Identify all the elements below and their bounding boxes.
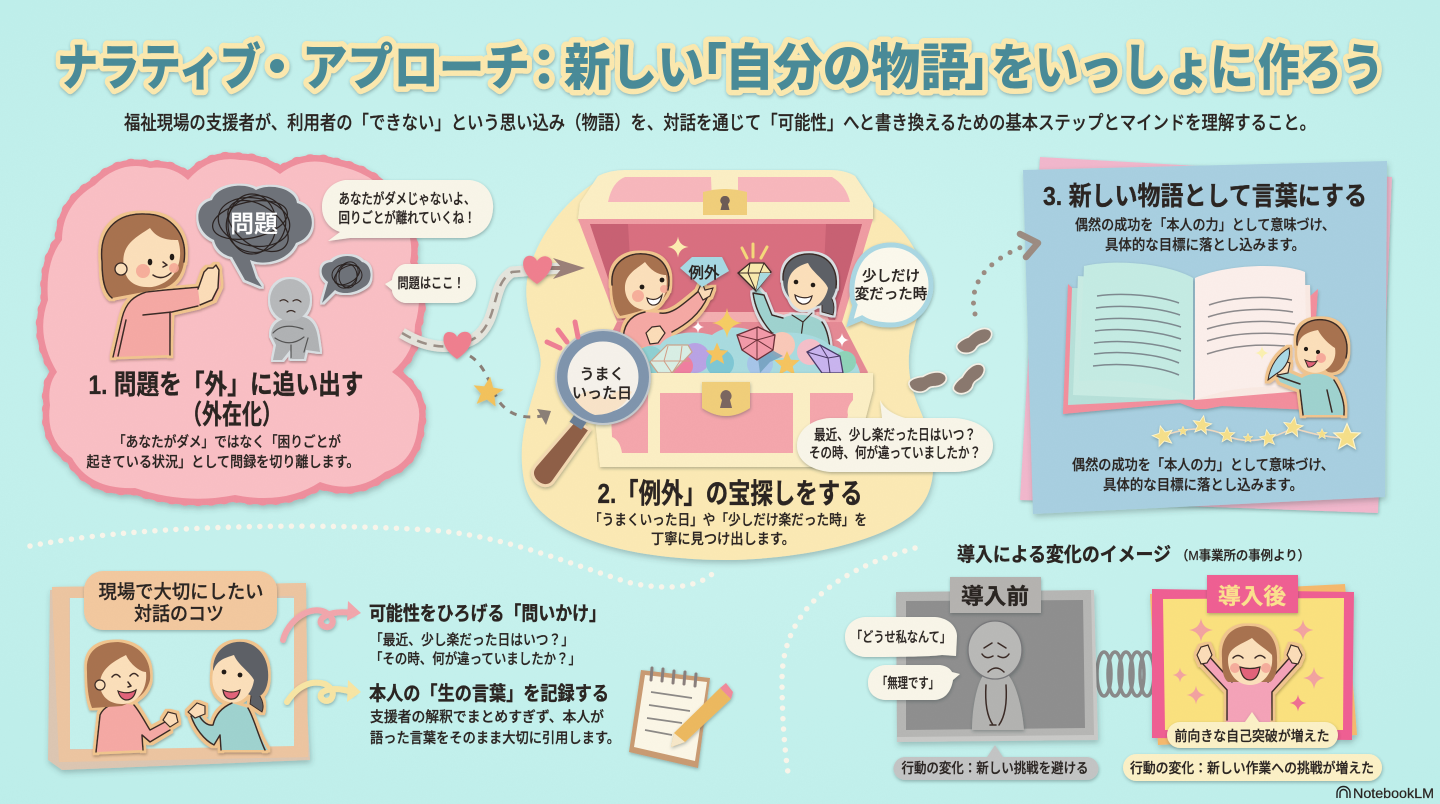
title: 自分の物語 [725,40,969,96]
pencil [671,683,733,747]
character: woman holding diamond [753,254,836,352]
dotted route [973,246,1024,314]
tab heading: 対話のコツ [134,603,224,625]
arrow head small [537,409,551,425]
title: ・ [252,40,302,96]
problem label: 問題 [230,211,278,238]
character: staff woman [188,642,268,750]
gem: teal diamond [650,345,692,373]
sparkle in lid [668,236,688,258]
tip 1 text [370,632,581,668]
arrow: pink curl [283,610,352,640]
speech bubble: a little easier: 少しだけ [862,268,920,285]
body text: step 2: 「うまくいった日」や「少しだけ楽だった時」を [589,512,867,529]
star garland [1150,414,1360,449]
title: アプローチ [302,40,530,96]
magnifier [532,330,650,486]
pill: self realization [1167,712,1338,748]
intro text [1075,217,1335,254]
chest lid [578,170,873,219]
title: ： [519,40,569,96]
behaviour pill: after [1123,754,1382,781]
title: 作ろう [1258,40,1384,96]
treasure chest [578,170,873,467]
behaviour pill: before [894,745,1098,780]
title: をいっしょに [991,40,1254,96]
back paper [1020,157,1392,513]
chest lock [702,382,750,416]
after tab [1207,575,1298,613]
logo: NotebookLM [1337,785,1434,801]
spring [1097,652,1154,696]
quote: impossible: 「無理です」 [877,675,939,691]
gem: purple diamond [807,345,843,373]
heading: 導入による変化のイメージ [957,543,1171,566]
decorative pearl dots: right [782,548,915,773]
gem label: exception [680,257,729,287]
panel: step 1 externalize [43,159,493,499]
tip 1 text: 「最近、少し楽だった日はいつ？」 [370,632,574,649]
magnifier: いった日 [572,385,632,402]
stars and sparkles [706,342,728,364]
speech bubble: not your fault: あなたがダメじゃないよ、 [338,190,476,208]
gem: pink diamond [737,327,775,360]
arrow head: pink [347,601,361,621]
tip 1 heading: 可能性をひろげる「問いかけ」 [369,603,606,625]
title: 新しい [564,40,704,96]
heart near chest [523,256,552,284]
tab heading [84,571,277,630]
magnifier text: うまく [579,366,625,383]
body text: step 2 [589,512,867,548]
closing text [1072,457,1334,494]
small problem cloud [322,256,371,303]
dashed route to magnifier [470,356,550,417]
character: joyful woman [1197,626,1302,728]
before panel [845,577,1098,780]
after panel [1123,575,1382,781]
closing text: 具体的な目標に落とし込みます。 [1103,477,1303,494]
photo frame [48,583,310,770]
character: gray hunched person [270,279,320,360]
star [471,375,505,407]
character: supporter pushing hand [102,214,221,357]
blob background [522,172,933,560]
before tab [950,577,1041,613]
panel: step 3 new story [1020,157,1392,514]
quote: self doubt: 「どうせ私なんて」 [851,629,951,645]
pill: self realization: 前向きな自己突破が増えた [1174,728,1330,744]
speech bubble: question: その時、何が違っていましたか？ [809,444,981,462]
body text: step 2: 丁寧に見つけ出します。 [651,531,795,548]
blue paper [1023,161,1387,514]
title [57,40,1384,96]
heading: externalization: （外在化） [182,400,282,430]
tip 2 heading: 本人の「生の言葉」を記録する [369,683,609,705]
page lines right [1207,297,1295,354]
before tab: 導入前 [961,584,1029,609]
big problem cloud [198,186,312,287]
title: 「 [677,40,727,96]
intro text: 偶然の成功を「本人の力」として意味づけ、 [1075,217,1335,234]
logo icon [1337,787,1350,798]
pink emphasis ticks [547,322,578,348]
intro text: 具体的な目標に落とし込みます。 [1105,237,1305,254]
title: 」 [964,40,1014,96]
sparkle on page [1255,346,1269,360]
road path [402,268,560,346]
tip 2 text [370,708,620,747]
footprints [908,325,995,398]
character: woman holding exception gem [612,254,713,350]
after tab: 導入後 [1218,584,1286,609]
sparkles [1172,618,1325,712]
arrow: path from step 1 to step 2 [402,256,585,425]
speech bubble: a little easier: 変だった時 [855,286,927,303]
speech bubble: problem is here [385,264,476,303]
speech bubble: problem is here: 問題はここ！ [398,275,464,291]
diamond held [738,263,771,291]
speech bubble: a little easier [850,245,931,325]
chest interior [578,219,873,373]
character: woman writing with quill [1268,320,1347,415]
heading note: （M事業所の事例より） [1176,548,1310,563]
panel: before and after [845,543,1382,781]
tip 2 text: 語った言葉をそのまま大切に引用します。 [370,730,620,747]
tip 2 text: 支援者の解釈でまとめすぎず、本人が [370,708,604,726]
heading: step 1: 1. 問題を「外」に追い出す [88,370,364,400]
after frame [1150,584,1357,745]
arrow head [1020,234,1038,257]
gem label: exception: 例外 [688,264,720,282]
tab heading: 現場で大切にしたい [98,581,264,603]
body text: step 1: 「あなたがダメ」ではなく「困りごとが [113,433,341,451]
arrow: yellow curl [287,683,352,702]
decorative pearl dots: left [30,526,716,587]
behaviour pill: before: 行動の変化：新しい挑戦を避ける [902,760,1088,776]
logo text: NotebookLM [1353,785,1434,801]
panel: dialogue tips [48,571,733,770]
closing text: 偶然の成功を「本人の力」として意味づけ、 [1072,457,1334,474]
shine marks [742,244,767,258]
heading: step 3: 3. 新しい物語として言葉にする [1043,181,1367,211]
body text: step 1: 起きている状況」として問録を切り離します。 [86,454,360,471]
icon: notepad and pencil [629,668,733,768]
tip 1 text: 「その時、何が違っていましたか？」 [370,650,581,668]
behaviour pill: after: 行動の変化：新しい作業への挑戦が増えた [1130,760,1374,776]
heading: step 2: 2.「例外」の宝探しをする [598,478,862,509]
speech bubble: question: 最近、少し楽だった日はいつ？ [814,427,976,444]
character: smiling woman [87,642,178,752]
arrow head: yellow [347,680,361,702]
arrow head [545,258,585,279]
cloud background [43,159,419,499]
body text: step 1 [86,433,360,471]
before frame [896,590,1098,742]
speech bubble: question [797,400,993,472]
panel: step 2 treasure hunt [522,170,993,560]
open book [1063,263,1318,414]
quote: self doubt [845,617,957,657]
page lines left [1093,294,1181,375]
speech bubble: not your fault: 回りごとが離れていくね！ [338,209,476,227]
notepad [629,668,710,768]
gloomy person [968,621,1024,730]
quote: impossible [868,665,960,700]
chest base [592,373,873,467]
heart on road [443,332,472,359]
title: ナラティブ [57,40,261,96]
treasure pile [633,308,860,377]
arrow: from step 2 to step 3 [908,234,1038,398]
speech bubble: not your fault [322,180,493,241]
